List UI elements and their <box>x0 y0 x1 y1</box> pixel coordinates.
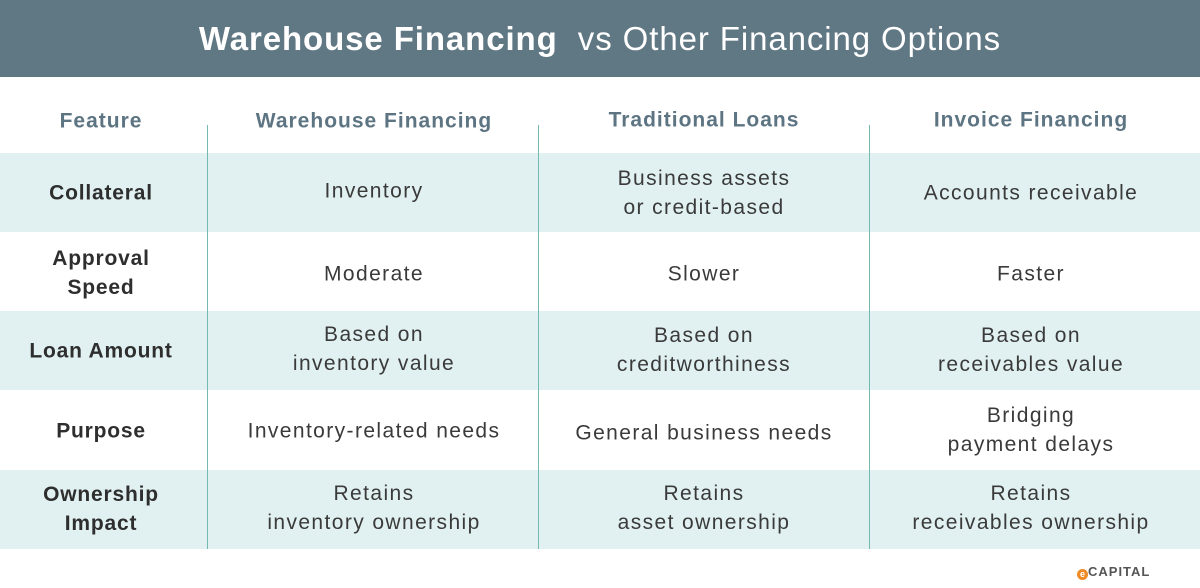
table: Based on <box>981 324 1081 347</box>
table: Retains <box>333 482 414 505</box>
table: Invoice Financing <box>934 108 1128 132</box>
table: Moderate <box>324 262 424 286</box>
logo: CAPITAL <box>1088 564 1150 579</box>
table: Accounts receivable <box>924 182 1138 204</box>
table: creditworthiness <box>617 353 791 376</box>
table: Inventory <box>325 180 423 202</box>
table: inventory value <box>293 352 455 375</box>
table: inventory ownership <box>267 511 481 534</box>
table: Retains <box>990 482 1072 505</box>
row: approval speed: Speed <box>67 276 135 299</box>
table: General business needs <box>575 422 833 444</box>
header row: Feature <box>60 110 142 132</box>
row: approval speed: Approval <box>52 247 150 270</box>
table: Bridging <box>987 404 1075 427</box>
table: payment delays <box>948 433 1114 456</box>
table: receivables ownership <box>912 511 1150 534</box>
table: or credit-based <box>623 196 785 219</box>
table: Faster <box>997 262 1065 286</box>
table: asset ownership <box>618 511 790 534</box>
row: purpose: Purpose <box>56 420 146 442</box>
row: ownership impact: Impact <box>65 512 137 535</box>
table: Traditional Loans <box>609 108 799 132</box>
table: receivables value <box>938 353 1124 376</box>
table: Based on <box>324 323 424 346</box>
row: ownership impact <box>43 483 159 535</box>
table: Inventory-related needs <box>248 420 500 442</box>
title bar <box>0 0 1200 77</box>
table: Based on <box>654 324 754 347</box>
table: Business assets <box>618 167 790 190</box>
row: loan amount: Loan Amount <box>29 340 173 362</box>
table: Retains <box>663 482 744 505</box>
table: Warehouse Financing <box>256 110 492 132</box>
logo: e <box>1080 569 1085 579</box>
row: approval speed <box>52 247 150 299</box>
row: ownership impact: Ownership <box>43 483 159 506</box>
title bar: Warehouse Financing vs Other Financing Options <box>199 20 1001 57</box>
table: Slower <box>668 262 740 286</box>
row: collateral: Collateral <box>49 182 153 204</box>
